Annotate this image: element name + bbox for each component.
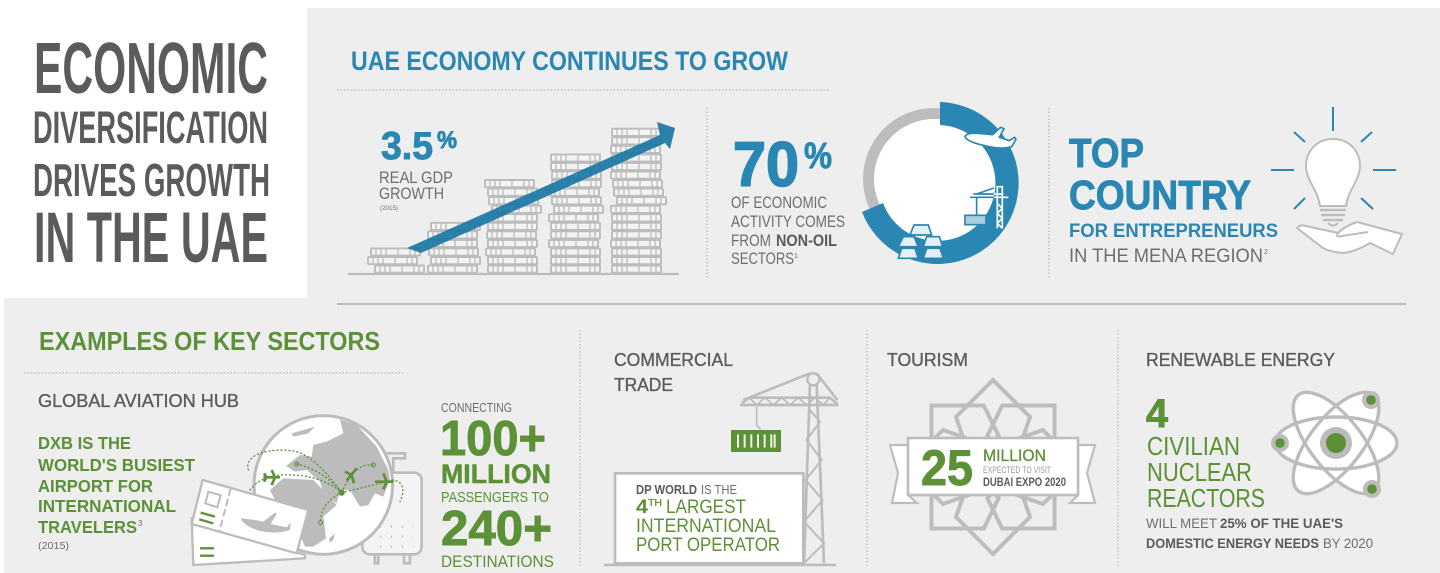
text: DXB busiest airport: DXB IS THE: [38, 433, 131, 453]
text: DP World 4th largest: [636, 482, 780, 556]
text: 25 percent of energy needs: BY 2020: [1323, 536, 1373, 551]
stats: connecting passengers: [440, 401, 554, 571]
label: of economic activity: [731, 194, 845, 268]
label: of economic activity: OF ECONOMIC: [731, 194, 827, 212]
text: top country for entrepreneurs: [1069, 130, 1278, 267]
icon: light bulb on hand: [1271, 107, 1402, 254]
text: 25 percent of energy needs: 25% OF THE UAE'S: [1220, 516, 1343, 531]
label: real GDP growth: (2015): [380, 205, 398, 212]
stat: 70%: %: [804, 135, 832, 176]
subheading: commercial trade: COMMERCIAL: [614, 350, 733, 370]
subheading: tourism: TOURISM: [887, 350, 968, 370]
stats: connecting passengers: 240+: [441, 502, 552, 556]
stat: 3.5%: %: [437, 127, 457, 154]
text: top country for entrepreneurs: IN THE MENA REGION: [1069, 245, 1263, 267]
subheading: commercial trade: [614, 350, 733, 395]
label: of economic activity: ACTIVITY COMES: [731, 213, 845, 231]
title: IN THE UAE: [34, 199, 268, 278]
text: DP World 4th largest: PORT OPERATOR: [636, 535, 780, 556]
stats: connecting passengers: PASSENGERS TO: [441, 489, 549, 506]
panel: global aviation hub: [38, 391, 554, 571]
stats: connecting passengers: CONNECTING: [441, 401, 512, 415]
panel: commercial trade: [604, 350, 838, 565]
icon: suitcase, globe and tickets: [192, 416, 422, 565]
stats: connecting passengers: 100+: [440, 412, 546, 466]
text: 25 percent of energy needs: WILL MEET: [1146, 516, 1217, 531]
text: civilian nuclear reactors: NUCLEAR: [1147, 457, 1252, 487]
text: DP World 4th largest: LARGEST: [666, 497, 746, 518]
text: 25 percent of energy needs: DOMESTIC ENERGY NEEDS: [1146, 536, 1319, 551]
icon: globe: [254, 416, 393, 554]
panel: top country: [1069, 107, 1402, 267]
banner: 25 million: DUBAI EXPO 2020: [983, 477, 1066, 489]
panel: non-oil sectors: [731, 102, 1019, 268]
text: DP World 4th largest: INTERNATIONAL: [636, 516, 776, 537]
title: [33, 29, 270, 278]
text: DXB busiest airport: AIRPORT FOR: [38, 476, 153, 496]
stat: 3.5%: 3.5: [381, 125, 433, 168]
chart: donut 70 percent: [862, 102, 1019, 264]
icon: hub markers and planes: [263, 462, 393, 525]
text: civilian nuclear reactors: [1146, 392, 1265, 513]
icon: tickets: [192, 480, 308, 565]
icon: plane: [965, 127, 1016, 148]
title: DRIVES GROWTH: [33, 154, 270, 206]
label: real GDP growth: GROWTH: [379, 184, 444, 203]
text: DXB busiest airport: TRAVELERS: [38, 517, 137, 537]
icon: crane with container: [604, 373, 838, 565]
label: of economic activity: SECTORS: [731, 250, 794, 268]
icon: star ornament: [905, 379, 1081, 555]
label: of economic activity: NON-OIL: [776, 232, 837, 250]
icon: gold bars: [898, 225, 943, 258]
text: civilian nuclear reactors: CIVILIAN: [1147, 431, 1240, 461]
text: DXB busiest airport: INTERNATIONAL: [38, 496, 176, 516]
text: DXB busiest airport: WORLD'S BUSIEST: [38, 455, 195, 475]
text: DP World 4th largest: 4: [636, 497, 648, 518]
text: DXB busiest airport: 3: [138, 519, 143, 528]
heading: examples of key sectors: EXAMPLES OF KEY SECTORS: [39, 326, 380, 356]
subheading: global aviation hub: GLOBAL AVIATION HUB: [38, 391, 239, 411]
text: DP World 4th largest: IS THE: [701, 482, 737, 497]
icon: atom: [1271, 379, 1397, 507]
text: DXB busiest airport: (2015): [38, 541, 69, 552]
subheading: renewable energy: RENEWABLE ENERGY: [1146, 350, 1335, 370]
panel: real GDP growth: [348, 122, 679, 274]
stats: connecting passengers: MILLION: [441, 459, 551, 489]
title: ECONOMIC: [34, 29, 268, 109]
banner: 25 million: 25: [921, 440, 973, 496]
text: 25 percent of energy needs: [1146, 516, 1373, 551]
text: top country for entrepreneurs: COUNTRY: [1069, 172, 1251, 218]
heading: UAE economy continues to grow: UAE ECONOMY CONTINUES TO GROW: [351, 46, 788, 76]
banner: 25 million: [890, 438, 1095, 503]
label: of economic activity: FROM: [731, 232, 771, 250]
text: top country for entrepreneurs: 2: [1264, 249, 1268, 256]
banner: 25 million: EXPECTED TO VISIT: [983, 465, 1051, 476]
routes: dotted flight paths: [248, 450, 403, 523]
icon: crane and container: [965, 187, 1008, 228]
icon: suitcase: [362, 453, 422, 563]
text: top country for entrepreneurs: TOP: [1069, 130, 1144, 176]
title: DIVERSIFICATION: [33, 102, 268, 153]
text: civilian nuclear reactors: REACTORS: [1147, 483, 1265, 513]
arrow: growth trend: [407, 122, 675, 253]
stat: 70%: 70: [733, 130, 799, 200]
text: DXB busiest airport: [38, 433, 195, 552]
panel: tourism: [887, 350, 1095, 555]
label: real GDP growth: REAL GDP: [379, 168, 453, 187]
label: real GDP growth: [379, 168, 453, 212]
text: top country for entrepreneurs: FOR ENTREPRENEURS: [1069, 221, 1278, 242]
subheading: commercial trade: TRADE: [614, 375, 673, 395]
chart: coin stacks: [348, 129, 679, 274]
text: civilian nuclear reactors: 4: [1146, 392, 1169, 436]
label: of economic activity: 1: [794, 253, 798, 260]
text: DP World 4th largest: DP WORLD: [636, 482, 697, 497]
stats: connecting passengers: DESTINATIONS: [441, 552, 554, 571]
banner: 25 million: MILLION: [983, 447, 1046, 465]
panel: renewable energy: [1146, 350, 1397, 551]
text: DP World 4th largest: TH: [648, 498, 662, 509]
